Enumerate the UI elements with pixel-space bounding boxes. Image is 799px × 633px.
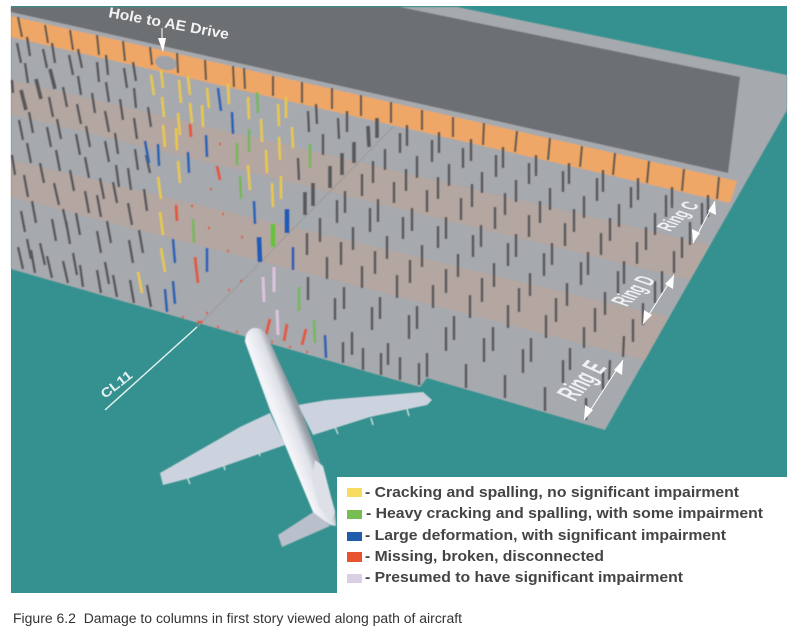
blue columns: large deformation [145,88,326,358]
legend item: pink: - Presumed to have significant impairment [365,569,683,586]
red dots: missing columns [182,144,308,352]
annotation: Ring D: Ring D [605,273,663,309]
arrow: Ring E extent [584,360,623,420]
legend item: red: - Missing, broken, disconnected [365,548,604,565]
red columns: missing or broken [176,124,306,345]
right wing [298,392,432,435]
green columns: heavy cracking [193,92,315,343]
ring band: brown 1 [11,80,710,280]
roof: dark inner section [11,7,740,173]
annotation: CL11 centerline: CL11 [98,367,135,401]
hole in wall [154,54,178,72]
floor slab [11,7,787,430]
fuselage [245,328,336,526]
legend panel [337,477,799,597]
undamaged columns [12,37,708,420]
stabilizer [278,511,330,547]
annotation: CL11 centerline [98,327,197,410]
orange courtyard band [11,16,737,203]
yellow columns: cracking and spalling [138,70,293,293]
arrow: to hole [158,28,166,52]
annotation: Ring D [605,273,674,324]
legend item: blue: - Large deformation, with significant impairment [365,527,726,544]
ring band: brown 2 [11,160,669,360]
legend background [337,477,799,597]
caption: Figure 6.2 Damage to columns in first story viewed along path of aircraft [13,611,462,626]
annotation: Ring E: Ring E [550,357,614,405]
building floor plan [11,7,787,430]
wing ticks [187,409,409,484]
annotation: Hole to AE Drive: Hole to AE Drive [107,5,230,43]
green column, thick [271,224,275,247]
pink columns: presumed impairment [263,267,278,335]
annotation: Ring C [652,199,716,243]
undamaged columns, thicker [21,69,377,215]
annotation: Ring C: Ring C [652,199,705,234]
tail fin [312,460,335,522]
aircraft [160,328,432,547]
orange band dividers [18,17,719,199]
arrow: Ring C extent [692,201,716,243]
arrow: Ring D extent [643,275,674,324]
centerline CL11 on floor [197,127,393,327]
legend item: green: - Heavy cracking and spalling, with some impairment [366,505,763,522]
legend item: yellow: - Cracking and spalling, no significant impairment [365,484,739,501]
left wing [160,413,285,485]
blue columns, thick [259,209,287,262]
annotation: Ring E [550,357,623,420]
